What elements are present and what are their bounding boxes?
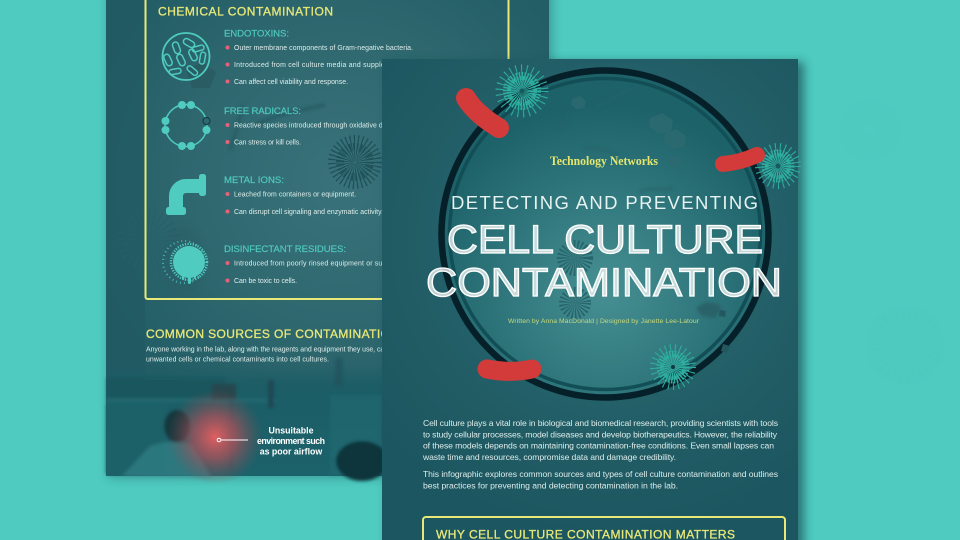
bacterium: top left [466,98,499,128]
text: common sources intro [146,346,388,364]
background image texture [106,0,374,476]
logo: Technology Networks [550,154,658,168]
faint background virus [852,112,925,365]
text: common sources intro: unwanted cells or chemical contaminants into cell cultures. [146,356,329,364]
intro text: of these models depends on maintaining contamination-free conditions. Even small lapses can [423,440,774,450]
text: endotoxins: Can affect cell viability and response. [234,79,348,86]
text: metal ions: Can disrupt cell signaling and enzymatic activity. [234,209,383,216]
intro text: Cell culture plays a vital role in biological and biomedical research, providing scientists with tools [423,418,778,428]
title: CONTAMINATION [426,261,782,305]
text: disinfectant residues: DISINFECTANT RESIDUES: [224,244,346,255]
bacterium: right [723,155,757,164]
intro text: waste time and resources, compromise data and damage credibility. [422,452,676,462]
title: DETECTING AND PREVENTING [451,192,758,213]
title: CELL CULTURE [447,218,763,262]
intro text: This infographic explores common sources and types of cell culture contamination and outlines [423,469,778,479]
text: free radicals: FREE RADICALS: [224,106,301,117]
text: endotoxins: Introduced from cell culture media and supplements. [234,62,407,69]
icon: free radicals [162,101,210,150]
dish specks [571,96,686,167]
panel: chemical contamination box [146,0,508,299]
callout: unsuitable environment: environment such [257,436,325,446]
title [426,192,782,305]
icon: disinfectant splat [163,241,207,284]
text: disinfectant residues [224,244,404,285]
text: endotoxins: ENDOTOXINS: [224,28,289,40]
text: free radicals: Can stress or kill cells. [234,140,301,146]
intro text [422,418,778,490]
callout box: why it matters [423,517,785,540]
callout: unsuitable environment: Unsuitable [269,426,314,436]
text: free radicals: Reactive species introduced through oxidative damage. [234,122,406,130]
text: disinfectant residues: Introduced from poorly rinsed equipment or surfaces. [234,260,404,268]
panel: lab photo [106,358,549,485]
byline: Written by Anna MacDonald | Designed by Janette Lee-Latour [508,318,700,325]
intro text: best practices for preventing and detecting contamination in the lab. [423,480,678,490]
callout: unsuitable environment: as poor airflow [260,446,322,456]
heading: common sources: COMMON SOURCES OF CONTAMINATION [146,327,399,341]
text: common sources intro: Anyone working in the lab, along with the reagents and equipment they use, can [146,346,388,354]
intro text: to study cellular processes, model diseases and develop biotherapeutics. However, the reliability [423,430,778,440]
virus: top [500,69,544,113]
text: metal ions: METAL IONS: [224,175,284,186]
text: metal ions [224,175,383,216]
icon: endotoxins [162,33,210,80]
panel: back page [106,0,552,478]
heading: chemical contamination: CHEMICAL CONTAMINATION [158,4,333,18]
text: endotoxins [224,28,413,86]
text: disinfectant residues: Can be toxic to cells. [234,278,297,285]
text: endotoxins: Outer membrane components of Gram-negative bacteria. [234,45,413,52]
red glow [167,389,263,485]
text: free radicals [224,106,406,146]
virus: right [759,147,797,185]
petri dish [442,70,768,398]
bacterium: bottom [487,369,532,371]
text: metal ions: Leached from containers or equipment. [234,192,356,198]
icon: metal ions pipe [166,174,206,215]
virus: bottom [654,348,692,386]
panel: front page [382,59,804,540]
callout: unsuitable environment [217,426,325,456]
